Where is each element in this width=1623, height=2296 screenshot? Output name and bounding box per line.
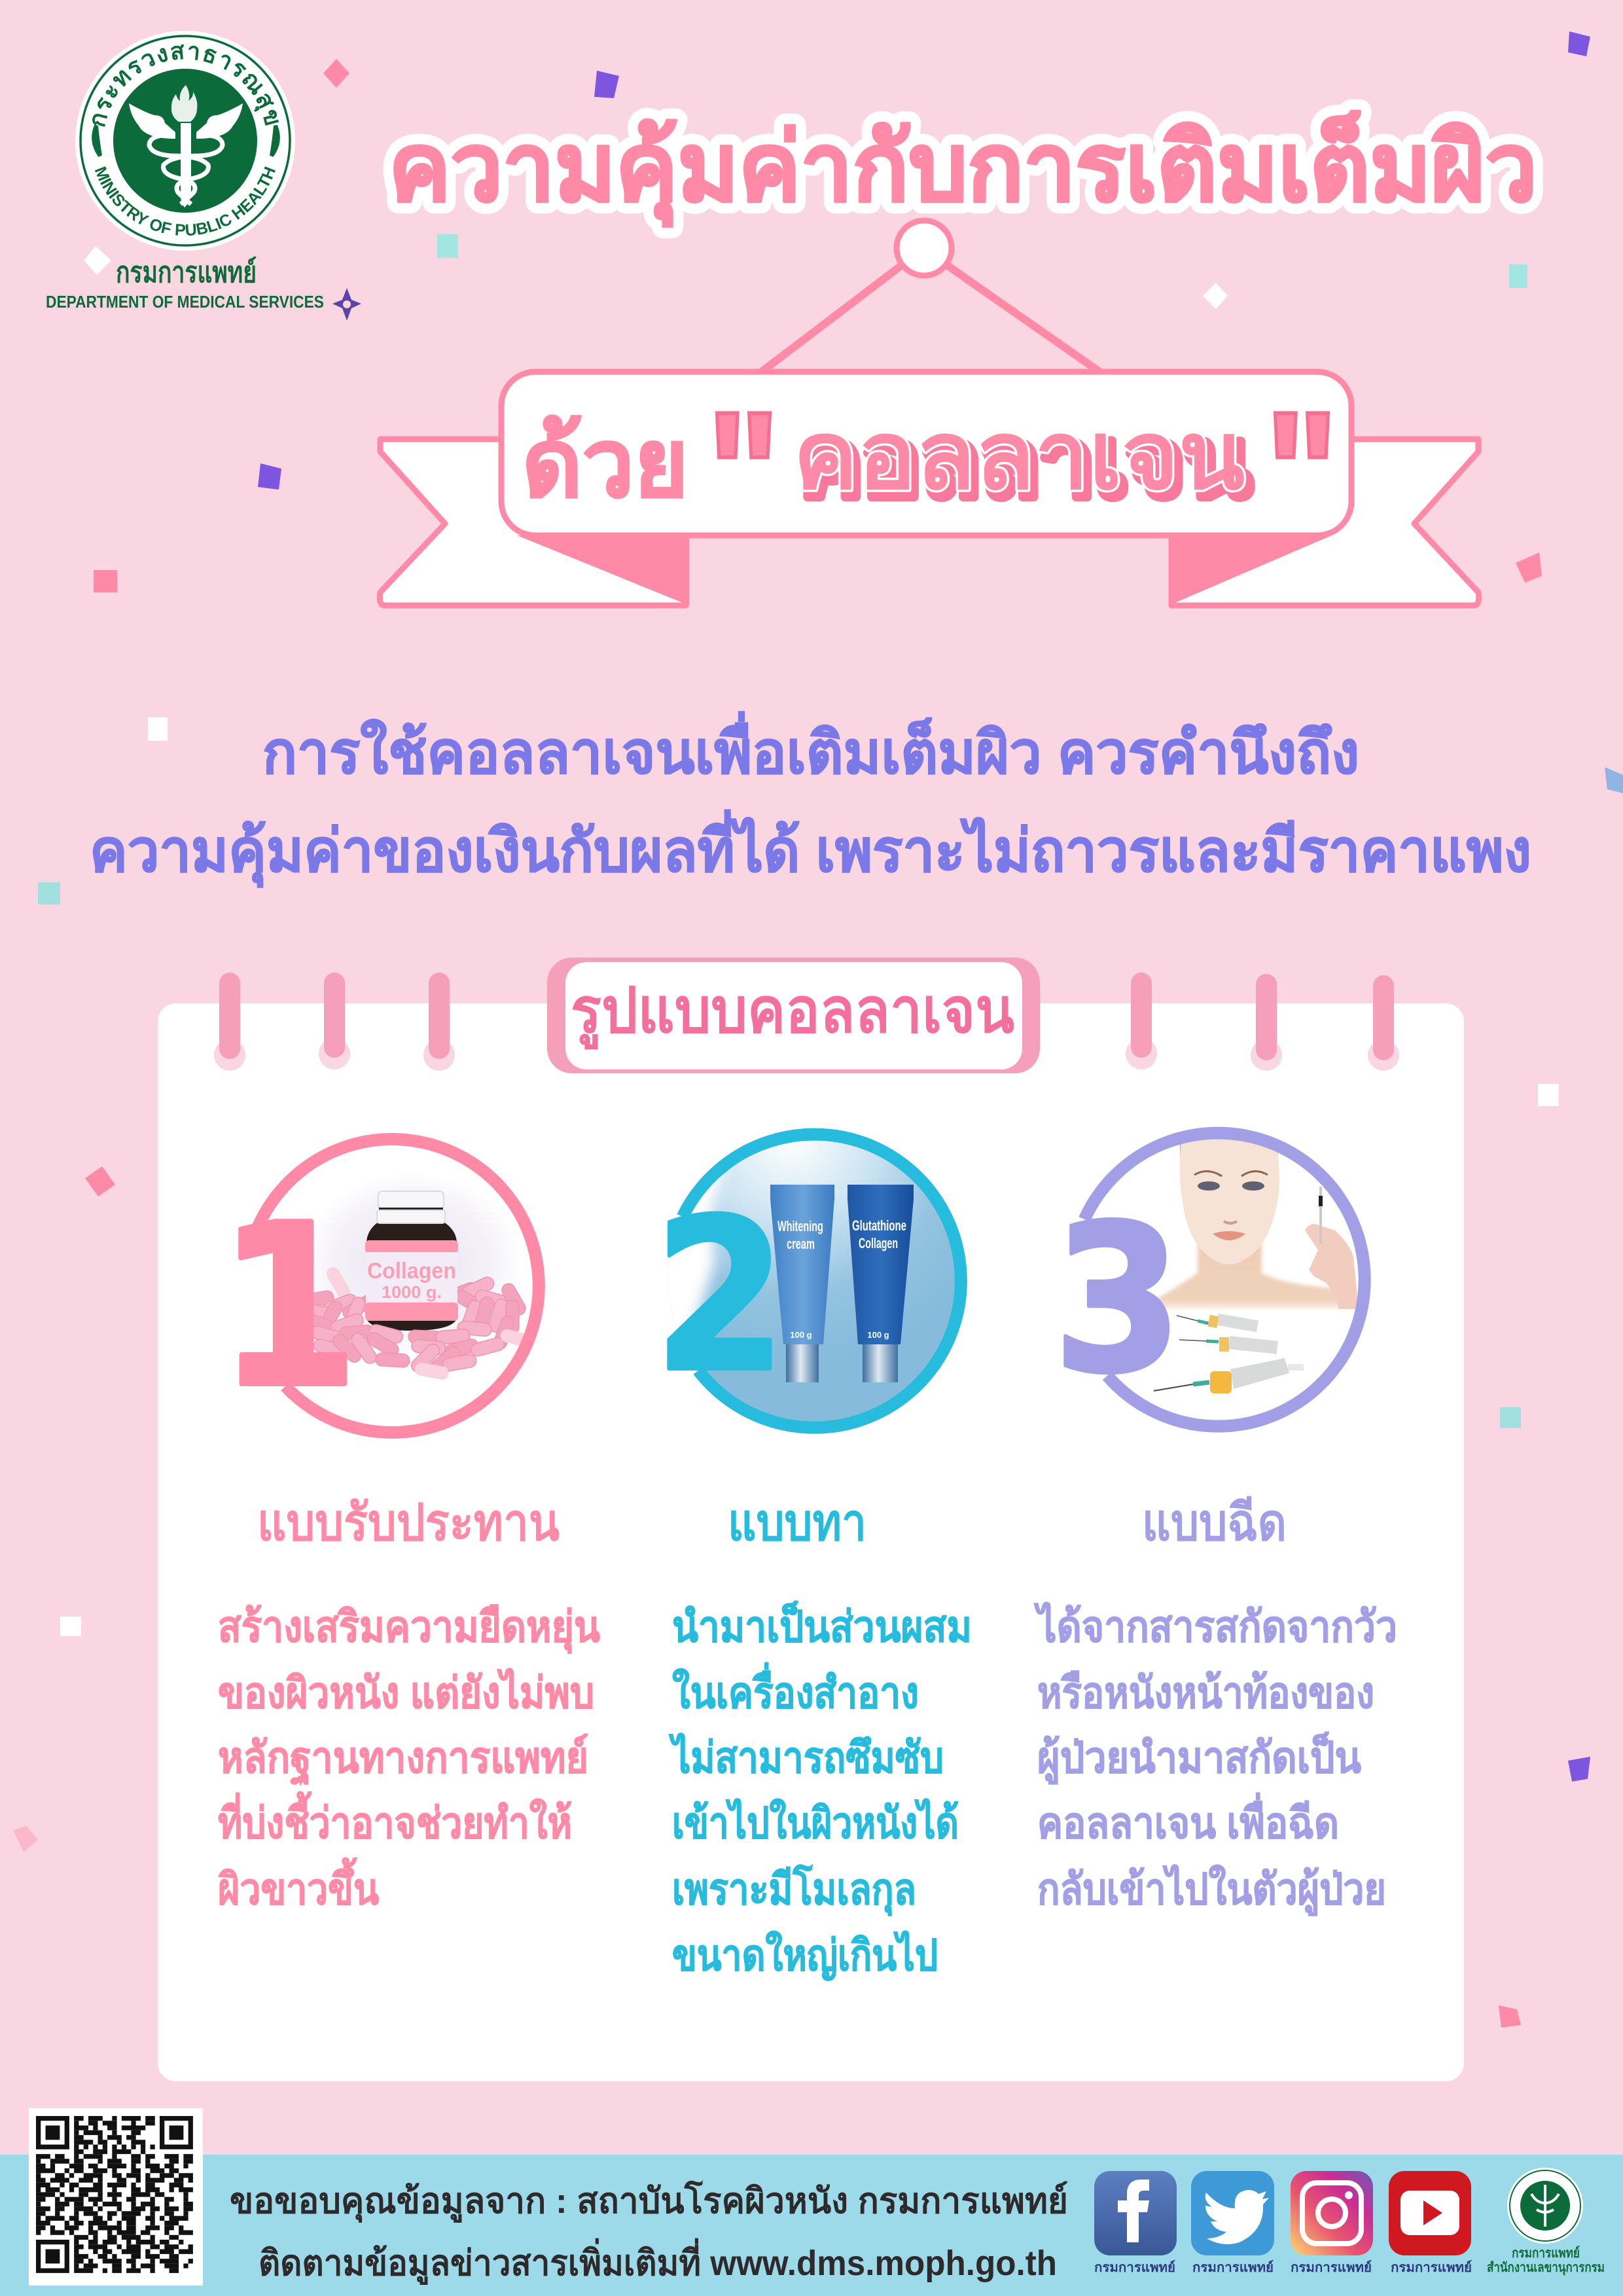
face <box>1180 1139 1279 1265</box>
bottle label: 1000 g. <box>382 1282 442 1302</box>
hanging pin <box>897 221 952 276</box>
tube labels <box>777 1217 906 1340</box>
collagen face: คอลลาเจน <box>793 403 1245 509</box>
heading tag <box>547 958 1040 1073</box>
heading text: รูปแบบคอลลาเจน <box>571 976 1014 1050</box>
tube labels: Glutathione <box>852 1217 906 1234</box>
small ministry seal <box>1507 2168 1583 2244</box>
icon labels: กรมการแพทย์ <box>1094 2260 1175 2275</box>
tube labels: 100 g <box>790 1330 812 1340</box>
column 1 text: ผิวขาวขึ้น <box>218 1857 379 1913</box>
footer text: website: ติดตามข้อมูลข่าวสารเพิ่มเติมที่ www.dms.moph.go.th <box>259 2238 1057 2285</box>
column 2 text: เพราะมีโมเลกุล <box>672 1863 916 1916</box>
tube labels: Collagen <box>859 1235 898 1251</box>
tube right <box>847 1185 914 1344</box>
logo text: department thai: กรมการแพทย์ <box>116 256 257 289</box>
column 3 text: คอลลาเจน เพื่อฉีด <box>1037 1792 1339 1847</box>
footer text: thanks: ขอขอบคุณข้อมูลจาก : สถาบันโรคผิวหนัง กรมการแพทย์ <box>230 2180 1068 2223</box>
logo text: department english: DEPARTMENT OF MEDICAL SERVICES <box>46 292 324 312</box>
ribbon main plate <box>501 372 1351 535</box>
column 1 text: ของผิวหนัง แต่ยังไม่พบ <box>218 1668 594 1717</box>
pills behind bottle <box>313 1267 526 1333</box>
ribbon text: with: ด้วย <box>522 410 688 516</box>
numeral 3: 3 <box>1053 1182 1183 1418</box>
ribbon text: opening quote: " <box>707 376 780 573</box>
photo: cosmetic tubes <box>668 1140 955 1422</box>
numeral 2: 2 <box>654 1175 787 1418</box>
column 1 text: หลักฐานทางการแพทย์ <box>218 1733 588 1785</box>
intro text <box>90 711 1531 888</box>
column 2 text: ไม่สามารถซึมซับ <box>669 1732 944 1782</box>
column 2 heading: แบบทา <box>728 1494 866 1551</box>
pills in front of bottle <box>309 1314 535 1380</box>
intro line 2: ความคุ้มค่าของเงินกับผลที่ได้ เพราะไม่ถาวรและมีราคาแพง <box>90 810 1531 888</box>
small seal text: secretary office: สำนักงานเลขานุการกรม <box>1487 2261 1605 2276</box>
syringes <box>1154 1314 1304 1393</box>
title face: ความคุ้มค่ากับการเติมเต็มผิว <box>389 111 1537 227</box>
photo: face and syringes <box>1154 1139 1359 1393</box>
ribbon banner <box>380 221 1479 605</box>
column 2 text: ในเครื่องสำอาง <box>672 1662 919 1717</box>
title halo: ความคุ้มค่ากับการเติมเต็มผิว <box>389 111 1537 227</box>
ribbon text: collagen <box>793 403 1251 516</box>
icon labels: กรมการแพทย์ <box>1291 2260 1372 2275</box>
column 3 text: ได้จากสารสกัดจากวัว <box>1034 1602 1397 1651</box>
column 3 heading: แบบฉีด <box>1142 1494 1287 1551</box>
intro line 1: การใช้คอลลาเจนเพื่อเติมเต็มผิว ควรคำนึงถึง <box>262 711 1359 786</box>
column 3 text <box>1034 1602 1397 1916</box>
hair <box>1182 1142 1277 1178</box>
column 3 text: ผู้ป่วยนำมาสกัดเป็น <box>1037 1731 1361 1785</box>
seal side ornaments <box>94 126 278 156</box>
nose <box>1224 1221 1237 1223</box>
hanging cord <box>760 249 1101 373</box>
column 3 text: กลับเข้าไปในตัวผู้ป่วย <box>1037 1863 1386 1916</box>
circle 2: topical collagen <box>654 1129 965 1437</box>
ribbon text: closing quote: " <box>1265 376 1338 573</box>
ring <box>254 1139 539 1433</box>
column 2 text <box>669 1600 972 1981</box>
collagen shadow: คอลลาเจน <box>798 410 1251 516</box>
bottle body <box>366 1222 457 1331</box>
icon labels: กรมการแพทย์ <box>1391 2260 1472 2275</box>
ring <box>683 1134 961 1427</box>
shoulders <box>1156 1244 1355 1309</box>
icon labels <box>1094 2260 1472 2275</box>
column 1 text: ที่บ่งชี้ว่าอาจช่วยทำให้ <box>218 1791 572 1847</box>
hand <box>1305 1224 1359 1309</box>
panel: collagen forms card <box>158 1003 1464 2081</box>
bottle label: Collagen <box>367 1259 456 1283</box>
eyes <box>1198 1181 1220 1191</box>
icon: instagram <box>1291 2171 1373 2255</box>
logo: ministry seal <box>75 31 295 251</box>
ring <box>1084 1133 1364 1426</box>
icon: youtube <box>1389 2171 1471 2255</box>
footer bar <box>0 2155 1623 2296</box>
flame <box>171 85 197 122</box>
numeral 1: 1 <box>218 1177 359 1437</box>
photo: collagen bottle and pills <box>313 1187 526 1380</box>
seal bottom arc text: MINISTRY OF PUBLIC HEALTH <box>95 166 276 236</box>
column 2 text: นำมาเป็นส่วนผสม <box>672 1600 972 1651</box>
wings <box>129 103 243 139</box>
icon: facebook <box>1094 2171 1177 2255</box>
needle <box>1319 1187 1322 1244</box>
ribbon left tail <box>380 439 686 605</box>
column 2 text: เข้าไปในผิวหนังได้ <box>672 1797 959 1847</box>
ribbon right tail <box>1171 439 1479 605</box>
tube labels: cream <box>787 1236 815 1252</box>
ribbon right fold <box>1169 535 1332 605</box>
icon: twitter <box>1191 2171 1274 2255</box>
qr code <box>29 2108 203 2286</box>
tube labels: 100 g <box>867 1330 889 1340</box>
lips <box>1213 1231 1245 1240</box>
circle 1: oral collagen <box>218 1139 539 1437</box>
column 1 heading: แบบรับประทาน <box>257 1494 560 1551</box>
icon labels: กรมการแพทย์ <box>1192 2260 1274 2275</box>
column 1 text: สร้างเสริมความยืดหยุ่น <box>218 1602 600 1654</box>
tube left <box>770 1185 834 1344</box>
title <box>389 111 1537 227</box>
bottle cap <box>377 1191 445 1223</box>
column 1 text <box>218 1602 600 1913</box>
seal caduceus <box>129 85 243 207</box>
small seal text: department: กรมการแพทย์ <box>1512 2246 1580 2261</box>
ribbon left fold <box>517 535 689 605</box>
column 2 text: ขนาดใหญ่เกินไป <box>672 1929 938 1981</box>
circle 3: injected collagen <box>1053 1133 1364 1426</box>
tube labels: Whitening <box>777 1218 823 1234</box>
column 3 text: หรือหนังหน้าท้องของ <box>1037 1668 1374 1717</box>
snakes <box>149 135 223 204</box>
bottle label <box>365 1240 458 1321</box>
binder rings <box>214 973 1399 1071</box>
seal top arc text: กระทรวงสาธารณสุข <box>92 45 279 127</box>
rod <box>181 123 191 195</box>
